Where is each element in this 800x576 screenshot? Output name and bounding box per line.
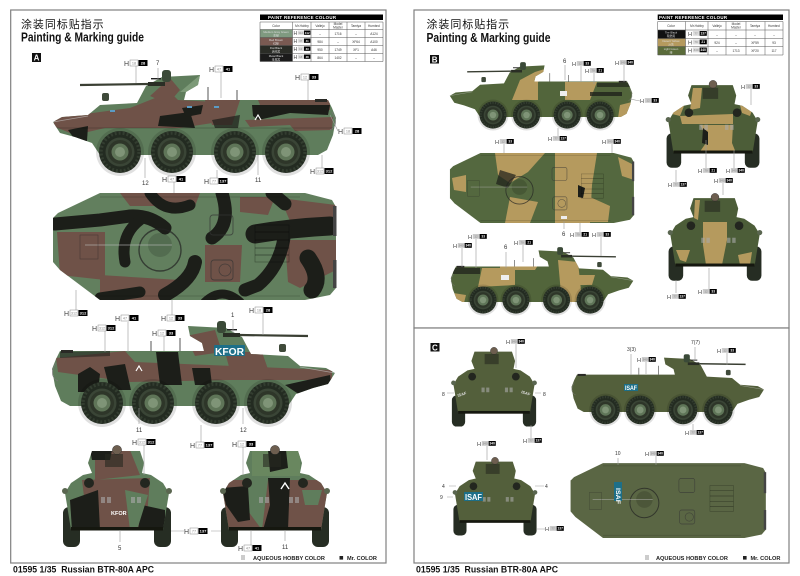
paint chips: panel C: 137 [536, 439, 541, 443]
paint chips: panel B: 12 [501, 140, 505, 144]
title: panel A heading [21, 17, 144, 44]
paint reference table B: – [716, 49, 718, 53]
ISAF marking: ISAF [625, 386, 637, 392]
paint chips: panel B: 33 [711, 290, 715, 294]
paint chips: panel A: 312 [148, 440, 155, 445]
paint chips: panel B: 33 [508, 140, 512, 144]
paint chips: panel C: 340 [642, 358, 648, 362]
paint chips: panel B: 33 [605, 233, 609, 237]
paint reference table B: 77 [694, 32, 698, 36]
paint chips: panel B: 137 [561, 137, 566, 141]
vehicle B top view [450, 153, 634, 223]
paint chips: panel C: 77 [529, 439, 533, 443]
paint chips: panel C: 340 [490, 442, 495, 446]
paint reference table A: 312 [305, 31, 310, 35]
paint chips: panel A: 47 [246, 547, 250, 551]
callouts: panel A numbers and leaders: 11 [282, 545, 289, 551]
paint chips: panel C: 340 [650, 358, 655, 362]
paint reference table A: 28 [306, 55, 309, 59]
paint chips: panel A: 41 [179, 177, 184, 182]
callouts: panel A numbers and leaders: 12 [142, 181, 149, 187]
paint chips: panel B: H [714, 179, 718, 185]
paint chips: panel A: H [209, 67, 214, 74]
paint reference table A: Medium Gray Green [263, 30, 289, 34]
paint chips: panel A: 47 [123, 317, 127, 321]
paint reference table A: 984 [317, 40, 323, 44]
callouts: panel A numbers and leaders: 5 [118, 546, 122, 552]
paint reference table A: 18 [299, 55, 303, 59]
paint chips: panel C: 340 [650, 452, 656, 456]
paint reference table B: XF20 [751, 49, 759, 53]
paint chips: panel C: H [637, 358, 641, 364]
paint reference table B: Desert Yellow [663, 39, 680, 43]
paint reference table B: Master [731, 26, 742, 30]
panel B border [414, 10, 789, 328]
callouts: panel A numbers and leaders: 12 [240, 428, 247, 434]
paint chips: panel A: H [232, 442, 237, 449]
paint chips: panel B: 340 [458, 244, 464, 248]
title: panel A heading: Painting & Marking guide [21, 30, 144, 44]
vehicle C front view [451, 347, 537, 427]
paint chips: panel A: 312 [326, 169, 333, 174]
paint reference table A: 消光黑 [272, 50, 280, 54]
paint chips: panel A: H [295, 75, 300, 82]
paint reference table A [260, 14, 383, 62]
paint chips: panel A: H [115, 316, 120, 323]
badge C [430, 343, 440, 352]
badge B [430, 55, 439, 64]
paint reference table B: 21 [701, 40, 705, 44]
paint reference table A: 1402 [334, 56, 342, 60]
paint chips: panel B: 340 [607, 140, 613, 144]
paint chips: panel B: 21 [583, 233, 587, 237]
paint chips: panel A: 137 [200, 529, 207, 534]
paint chips: panel A: H [310, 169, 315, 176]
paint chips: panel A: 12 [240, 443, 244, 447]
paint chips: panel A: 18 [132, 62, 136, 66]
paint chips: panel A: 33 [169, 331, 174, 336]
paint chips: panel B: 77 [554, 137, 558, 141]
paint reference table A: – [373, 56, 375, 60]
paint reference table B: Humbrol [768, 24, 780, 28]
paint chips: panel B: 12 [578, 62, 582, 66]
paint chips: panel B: 340 [620, 61, 626, 65]
paint reference table B: Color [667, 24, 676, 28]
paint reference table A: Vallejo [315, 24, 325, 28]
legend: panel A: AQUEOUS HOBBY COLOR [253, 556, 325, 562]
vehicle C top view [571, 463, 766, 538]
paint reference table B: 93 [772, 41, 776, 45]
paint chips: panel C: 137 [698, 431, 703, 435]
paint chips: panel B: H [741, 85, 745, 91]
paint chips: panel C: 340 [511, 340, 517, 344]
vehicle C front view: ISAF [521, 389, 531, 397]
vehicle C side view [572, 354, 764, 426]
paint chips: panel B: H [570, 233, 574, 239]
paint chips: panel B: 33 [754, 85, 758, 89]
paint reference table A: Tamiya [351, 24, 361, 28]
paint reference table A: 950 [317, 48, 323, 52]
paint reference table A: – [355, 32, 357, 36]
paint chips: panel B: H [667, 295, 671, 301]
paint reference table B: 924 [714, 41, 720, 45]
callouts: panel C numbers and leaders: 8 [543, 392, 546, 398]
paint chips: panel B: H [698, 169, 702, 175]
callouts: panel A numbers and leaders: 1 [231, 313, 235, 319]
callouts: panel C numbers and leaders: 7(7) [691, 340, 700, 346]
paint reference table A: Flat Black [270, 46, 283, 50]
callouts: panel B numbers and leaders: 6 [504, 245, 508, 251]
paint chips: panel B: 12 [598, 233, 602, 237]
paint reference table B: – [754, 33, 756, 37]
paint chips: panel B: H [668, 183, 672, 189]
paint chips: panel A: H [162, 177, 167, 184]
callouts: panel C numbers and leaders: 4 [442, 484, 445, 490]
paint chips: panel A: H [190, 443, 195, 450]
callouts: panel C numbers and leaders: 9 [440, 495, 443, 501]
legend: panel C: Mr. COLOR [750, 556, 781, 562]
paint chips: panel A: 312 [139, 441, 145, 445]
paint reference table A: H [294, 31, 298, 37]
badge A [32, 53, 41, 63]
paint chips: panel B: H [548, 137, 552, 143]
paint chips: panel C: H [685, 431, 689, 437]
paint chips: panel B: 340 [727, 179, 732, 183]
paint reference table A: A46 [371, 48, 377, 52]
paint chips: panel A: H [249, 308, 254, 315]
paint reference table B: 轮胎黑 [667, 34, 675, 38]
badge A: A [34, 54, 40, 63]
paint reference table B: PAINT REFERENCE COLOUR [659, 15, 728, 20]
paint reference table A: XF1 [353, 48, 359, 52]
paint chips: panel B: H [640, 99, 644, 105]
callouts: panel A numbers and leaders [76, 61, 338, 552]
paint reference table B: – [716, 33, 718, 37]
legend: panel C: AQUEOUS HOBBY COLOR [656, 556, 728, 562]
paint chips: panel A: 47 [170, 178, 174, 182]
paint chips: panel B: 79 [591, 69, 595, 73]
paint chips: panel A: 47 [217, 68, 221, 72]
paint chips: panel B: 12 [646, 99, 650, 103]
paint reference table B: Tamiya [750, 24, 760, 28]
paint reference table B: Vallejo [712, 24, 722, 28]
paint reference table A: Color [272, 24, 281, 28]
paint reference table A: H [294, 55, 298, 61]
paint chips: panel B: 21 [711, 169, 715, 173]
paint chips: panel B: 79 [704, 169, 708, 173]
paint reference table B: 沙黄 [668, 42, 674, 46]
vehicle B side view [450, 62, 632, 131]
paint chips: panel C: H [523, 439, 527, 445]
paint reference table B: – [735, 33, 737, 37]
paint reference table B: XF59 [751, 41, 759, 45]
badge C: C [432, 343, 438, 352]
paint chips: panel A: 18 [257, 309, 261, 313]
paint chips: panel A: 28 [266, 308, 271, 313]
paint reference table A: 灰绿 [273, 34, 279, 38]
paint chips: panel B: H [453, 244, 457, 250]
paint chips: panel B: 33 [585, 62, 589, 66]
paint reference table B: 绿 [670, 50, 673, 54]
vehicle A front view: KFOR [111, 511, 127, 517]
paint chips: panel A: H [152, 331, 157, 338]
paint chips: panel C: H [477, 442, 481, 448]
paint reference table A: – [355, 56, 357, 60]
paint chips: panel B: 340 [719, 179, 725, 183]
paint chips: panel A: 41 [226, 67, 231, 72]
paint reference table A: PAINT REFERENCE COLOUR [268, 15, 337, 20]
paint reference table A: 41 [306, 39, 309, 43]
paint reference table B: Model [732, 22, 741, 26]
paint reference table A: Model [334, 22, 343, 26]
ISAF marking [624, 384, 638, 392]
paint chips: panel B: H [514, 241, 518, 247]
paint chips: panel A [64, 60, 362, 553]
paint reference table B: Light Green [664, 47, 679, 51]
paint chips: panel B: H [698, 290, 702, 296]
paint chips: panel B: H [572, 62, 576, 68]
paint chips: panel B: 137 [680, 295, 685, 299]
paint reference table A: 金属黑 [272, 58, 280, 62]
callouts: panel C numbers and leaders [440, 340, 727, 529]
paint chips: panel A: H [204, 179, 209, 186]
paint chips: panel A: 12 [303, 76, 307, 80]
callouts: panel C numbers and leaders: 8 [442, 392, 445, 398]
paint reference table B: Tire Black [665, 30, 678, 34]
paint chips: panel A: H [338, 129, 343, 136]
callouts: panel C numbers and leaders: 10 [615, 451, 621, 457]
paint chips: panel B: 79 [576, 233, 580, 237]
paint reference table A: – [337, 40, 339, 44]
legend: panel C [645, 555, 781, 562]
paint chips: panel A: H [161, 316, 166, 323]
paint chips: panel A: H [238, 546, 243, 553]
paint reference table A: Red Brown [269, 38, 283, 42]
paint chips: panel B: H [726, 169, 730, 175]
paint chips: panel A: 312 [71, 312, 77, 316]
paint chips: panel A: 77 [212, 180, 216, 184]
paint reference table A: XF64 [352, 40, 360, 44]
vehicle A top view [53, 193, 336, 302]
paint chips: panel B: H [602, 140, 606, 146]
paint reference table B: 79 [694, 40, 698, 44]
paint chips: panel B: 340 [731, 169, 737, 173]
paint reference table B: H [688, 32, 692, 38]
paint chips: panel C: H [506, 340, 510, 346]
vehicle A front view [62, 445, 172, 547]
paint chips: panel A: 41 [255, 546, 260, 551]
paint reference table B: – [735, 41, 737, 45]
paint chips: panel B: 79 [520, 241, 524, 245]
paint chips: panel A: 312 [99, 327, 105, 331]
legend: panel A: Mr. COLOR [347, 556, 377, 562]
paint reference table B: 137 [701, 32, 706, 36]
paint chips: panel B: H [468, 235, 472, 241]
KFOR marking: KFOR [215, 346, 244, 358]
paint reference table B: – [773, 33, 775, 37]
paint chips: panel C: 340 [519, 340, 524, 344]
callouts: panel B numbers and leaders: 6 [562, 232, 566, 238]
paint chips: panel C: 340 [658, 452, 663, 456]
footer: right page: 01595 1/35 Russian BTR-80A APC [416, 564, 559, 574]
paint chips: panel B: 21 [598, 69, 602, 73]
paint chips: panel C: 12 [723, 349, 727, 353]
paint chips: panel B: 77 [674, 183, 678, 187]
paint chips: panel B: 12 [474, 235, 478, 239]
ISAF rear marking: ISAF [465, 493, 482, 502]
paint reference table A: 12 [299, 47, 303, 51]
title: panel B heading [426, 17, 550, 45]
paint reference table A: A100 [370, 40, 378, 44]
paint chips: panel C: 77 [691, 431, 695, 435]
vehicle B rear view [668, 193, 762, 281]
callouts: panel C numbers and leaders: 3(3) [627, 347, 636, 353]
panel C border [414, 328, 789, 563]
paint chips: panel B: H [585, 69, 589, 75]
footer: left page: 01595 1/35 Russian BTR-80A APC [13, 564, 155, 574]
callouts: panel C numbers and leaders: 4 [545, 484, 548, 490]
paint reference table A: 红棕 [273, 42, 279, 46]
callouts: panel A numbers and leaders: 11 [255, 178, 262, 184]
panel A border [11, 10, 386, 563]
vehicle A rear view [220, 445, 330, 547]
paint reference table A: A124 [370, 32, 378, 36]
paint chips: panel C: 137 [558, 527, 563, 531]
paint chips: panel A: 33 [249, 442, 254, 447]
paint chips: panel A: H [92, 326, 97, 333]
paint chips: panel B: 33 [653, 99, 657, 103]
paint chips: panel B [453, 60, 760, 301]
paint chips: panel A: H [132, 440, 137, 447]
vehicle C rear view [453, 457, 537, 536]
paint reference table A: 1716 [334, 32, 342, 36]
paint reference table A: 1749 [334, 48, 342, 52]
paint chips: panel B: 33 [481, 235, 485, 239]
paint reference table B: 117 [771, 49, 777, 53]
vehicle C front view: ISAF [457, 390, 468, 398]
paint chips: panel A: 33 [312, 75, 317, 80]
paint reference table A: – [319, 32, 321, 36]
paint chips: panel C: H [717, 349, 721, 355]
paint reference table B: H [688, 48, 692, 54]
paint chips: panel A: 12 [169, 317, 173, 321]
ISAF top marking: ISAF [614, 488, 620, 504]
paint chips: panel B: H [592, 233, 596, 239]
paint chips: panel A: 137 [206, 443, 213, 448]
paint chips: panel B: 137 [681, 183, 686, 187]
paint reference table B: 1713 [732, 49, 740, 53]
vehicle B second side view [451, 247, 633, 316]
paint chips: panel A: 12 [160, 332, 164, 336]
paint reference table A: 33 [306, 47, 309, 51]
paint chips: panel B: H [615, 61, 619, 67]
paint chips: panel B: 340 [739, 169, 744, 173]
paint chips: panel A: 77 [192, 530, 196, 534]
callouts: panel A numbers and leaders: 7 [156, 61, 160, 67]
paint reference table A: H [294, 47, 298, 53]
paint reference table A: 312 [298, 31, 303, 35]
paint chips: panel C: 77 [551, 527, 555, 531]
paint chips: panel A: 28 [355, 129, 360, 134]
paint chips: panel A: 312 [80, 311, 87, 316]
paint reference table A: Metal Black [269, 54, 284, 58]
paint chips: panel A: H [124, 61, 129, 68]
paint chips: panel B: 12 [747, 85, 751, 89]
title: panel B heading: 涂装同标贴指示 [426, 17, 510, 31]
paint reference table A: Humbrol [368, 24, 380, 28]
paint chips: panel C: H [545, 527, 549, 533]
paint chips: panel B: 77 [673, 295, 677, 299]
legend: panel A [241, 555, 377, 562]
paint reference table B: H [688, 40, 692, 46]
callouts: panel B numbers and leaders [462, 59, 751, 293]
paint chips: panel A: H [64, 311, 69, 318]
paint chips: panel B: H [495, 140, 499, 146]
paint chips: panel C: 340 [482, 442, 488, 446]
paint reference table A: Master [333, 26, 344, 30]
paint reference table B: 340 [701, 48, 706, 52]
paint reference table A: 864 [317, 56, 323, 60]
paint chips: panel B: 21 [527, 241, 531, 245]
paint chips: panel A: 18 [346, 130, 350, 134]
paint chips: panel A: 41 [132, 316, 137, 321]
paint reference table A: 47 [299, 39, 303, 43]
paint chips: panel A: 77 [198, 444, 202, 448]
paint chips: panel A: 312 [108, 326, 115, 331]
paint chips: panel C: H [645, 452, 649, 458]
title: panel B heading: Painting & Marking guide [426, 30, 550, 45]
paint chips: panel A: 312 [317, 170, 323, 174]
vehicle A side view, facing left [53, 70, 336, 176]
paint reference table B: 340 [693, 48, 699, 52]
title: panel A heading: 涂装同标贴指示 [21, 17, 105, 31]
vehicle A second side view, facing right, KFOR [52, 321, 335, 427]
paint reference table B [658, 14, 783, 55]
paint chips: panel C: 33 [730, 349, 734, 353]
paint chips: panel C [477, 339, 736, 533]
paint chips: panel A: H [184, 529, 189, 536]
callouts: panel A numbers and leaders: 11 [136, 428, 143, 434]
paint chips: panel A: 137 [220, 179, 227, 184]
paint chips: panel B: 340 [628, 61, 633, 65]
paint reference table A: Mr.Hobby [295, 24, 309, 28]
paint chips: panel A: 28 [141, 61, 146, 66]
paint reference table B: Mr.Hobby [690, 24, 704, 28]
paint chips: panel B: 340 [466, 244, 471, 248]
paint chips: panel B: 340 [615, 140, 620, 144]
callouts: panel B numbers and leaders: 6 [563, 59, 567, 65]
paint chips: panel B: 12 [704, 290, 708, 294]
badge B: B [432, 55, 438, 64]
ISAF top marking [614, 482, 622, 504]
paint chips: panel A: 33 [178, 316, 183, 321]
vehicle B front view [666, 80, 760, 168]
paint reference table A: H [294, 39, 298, 45]
